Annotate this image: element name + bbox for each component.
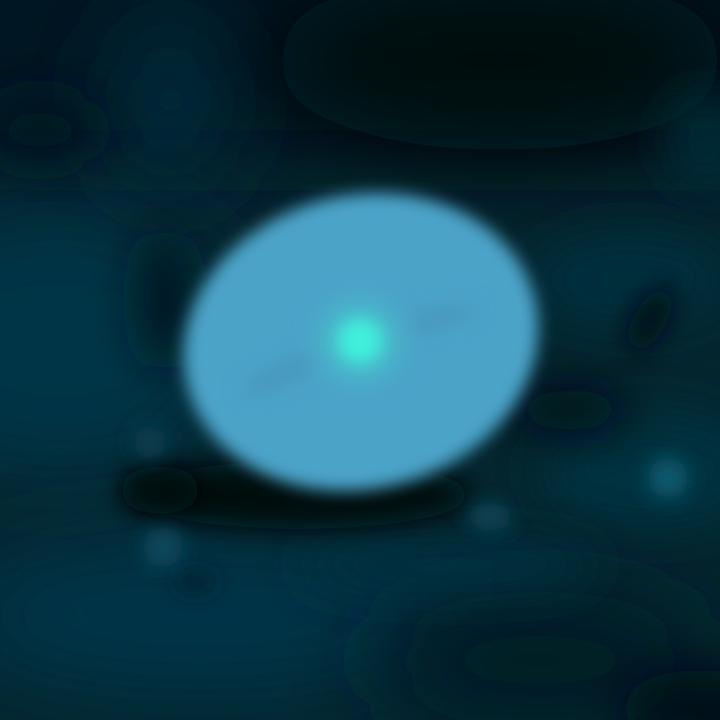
faint glowing spots	[134, 427, 688, 567]
main blue disc	[152, 156, 570, 528]
subtle darker streaks within the disc	[238, 300, 479, 401]
central bright turquoise core	[320, 301, 400, 381]
dark dust lane under the disc	[120, 230, 682, 592]
